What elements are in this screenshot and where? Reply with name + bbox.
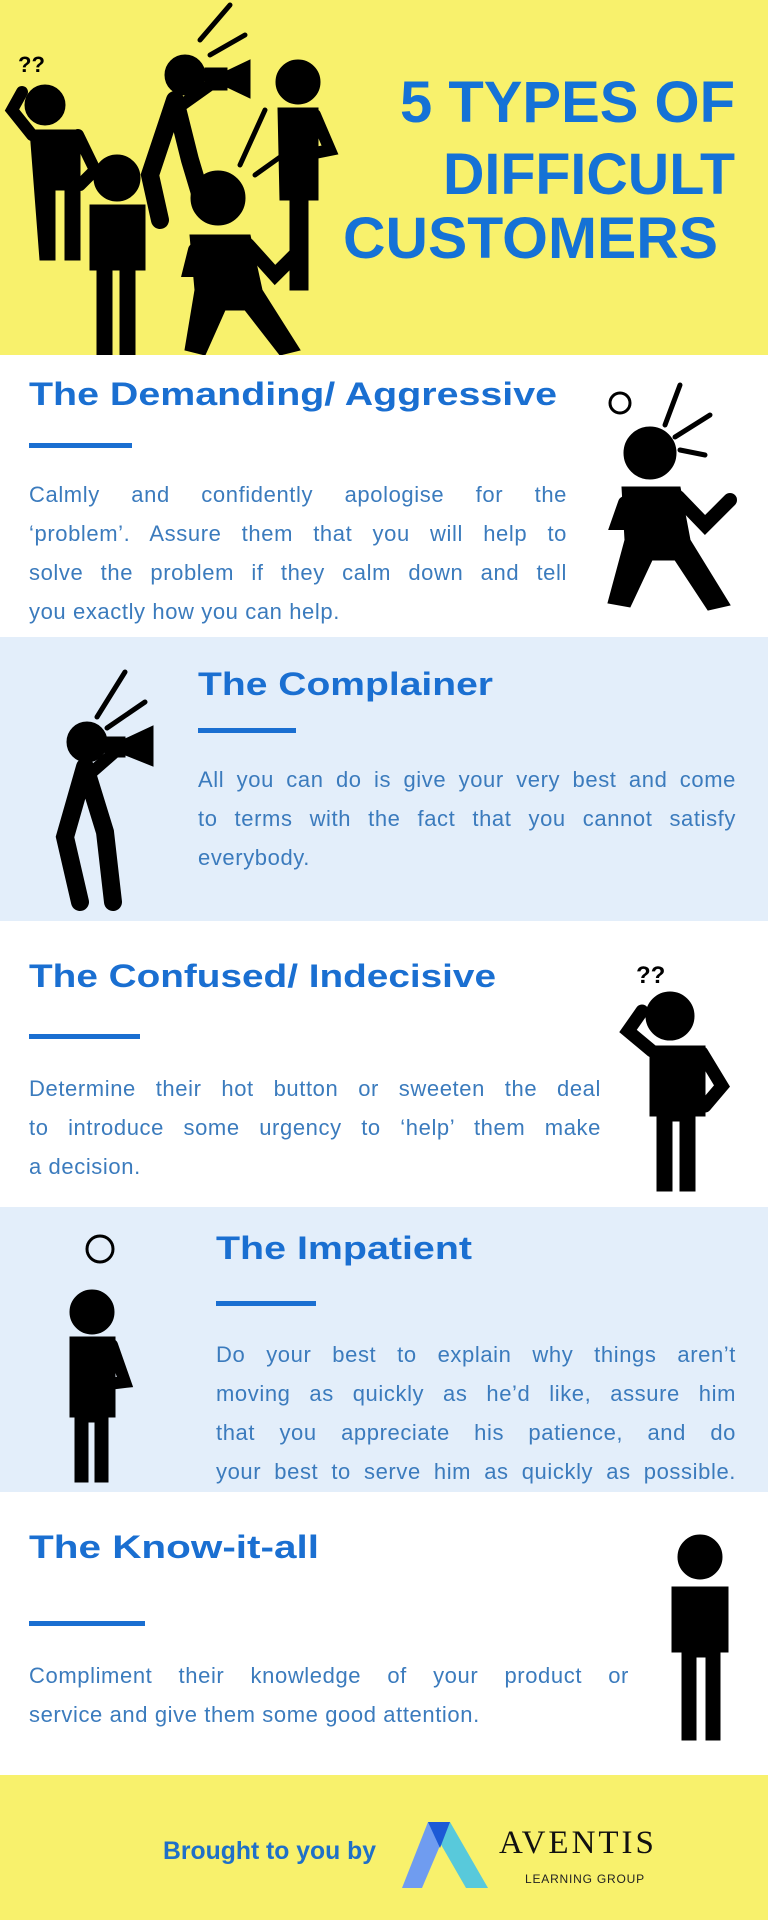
panel: demanding (29, 376, 737, 624)
logo mark (402, 1822, 488, 1888)
logo text: AVENTIS (499, 1825, 657, 1861)
heading: The Demanding/ Aggressive (29, 376, 557, 412)
underline (29, 1034, 140, 1039)
text: Do your best to explain why things aren’t (216, 1342, 736, 1367)
impatient (276, 60, 320, 104)
text (29, 1076, 601, 1179)
title: DIFFICULT (443, 142, 735, 207)
panel: know-it-all (29, 1529, 728, 1740)
underline (198, 728, 296, 733)
underline (216, 1301, 316, 1306)
text: All you can do is give your very best and come (198, 767, 736, 792)
text: to introduce some urgency to ‘help’ them make (29, 1115, 601, 1140)
text (216, 1342, 736, 1484)
icon: megaphone figure (56, 670, 154, 911)
footer (163, 1822, 657, 1888)
text: service and give them some good attention. (29, 1702, 480, 1727)
icon: impatient figure (70, 1234, 134, 1482)
panel backgrounds (0, 637, 768, 921)
text (198, 767, 736, 870)
header figures group: ?? (18, 52, 45, 77)
text: ‘problem’. Assure them that you will help to (29, 521, 567, 546)
confused (25, 85, 65, 125)
icon: confused figure: ?? (636, 962, 665, 989)
panel: confused (29, 958, 730, 1192)
title: CUSTOMERS (343, 206, 718, 271)
text: a decision. (29, 1154, 141, 1179)
aggressive (191, 171, 245, 225)
icon: confused figure (619, 962, 730, 1192)
text (29, 482, 567, 624)
footer: LEARNING GROUP (525, 1872, 645, 1886)
underline (29, 1621, 145, 1626)
panel: complainer (56, 666, 736, 911)
text: solve the problem if they calm down and tell (29, 560, 567, 585)
title (343, 70, 735, 271)
title: 5 TYPES OF (400, 70, 735, 135)
text: everybody. (198, 845, 310, 870)
text: to terms with the fact that you cannot satisfy (198, 806, 736, 831)
brought to you by: Brought to you by (163, 1837, 376, 1865)
panel: impatient (70, 1230, 736, 1484)
icon: know-it-all figure (672, 1534, 728, 1740)
text: you exactly how you can help. (29, 599, 340, 624)
header background (0, 0, 768, 355)
text: Compliment their knowledge of your product or (29, 1663, 629, 1688)
underline (29, 443, 132, 448)
text: your best to serve him as quickly as possible. (216, 1459, 736, 1484)
heading: The Complainer (198, 666, 493, 702)
text: moving as quickly as he’d like, assure him (216, 1381, 736, 1406)
text (29, 1663, 629, 1727)
know-it-all (94, 155, 140, 201)
heading: The Impatient (216, 1230, 472, 1266)
text: that you appreciate his patience, and do (216, 1420, 736, 1445)
text: Determine their hot button or sweeten the deal (29, 1076, 601, 1101)
shouting w/ megaphone (165, 55, 205, 95)
icon: aggressive figure (607, 382, 737, 611)
text: Calmly and confidently apologise for the (29, 482, 567, 507)
header figures group (4, 2, 338, 355)
